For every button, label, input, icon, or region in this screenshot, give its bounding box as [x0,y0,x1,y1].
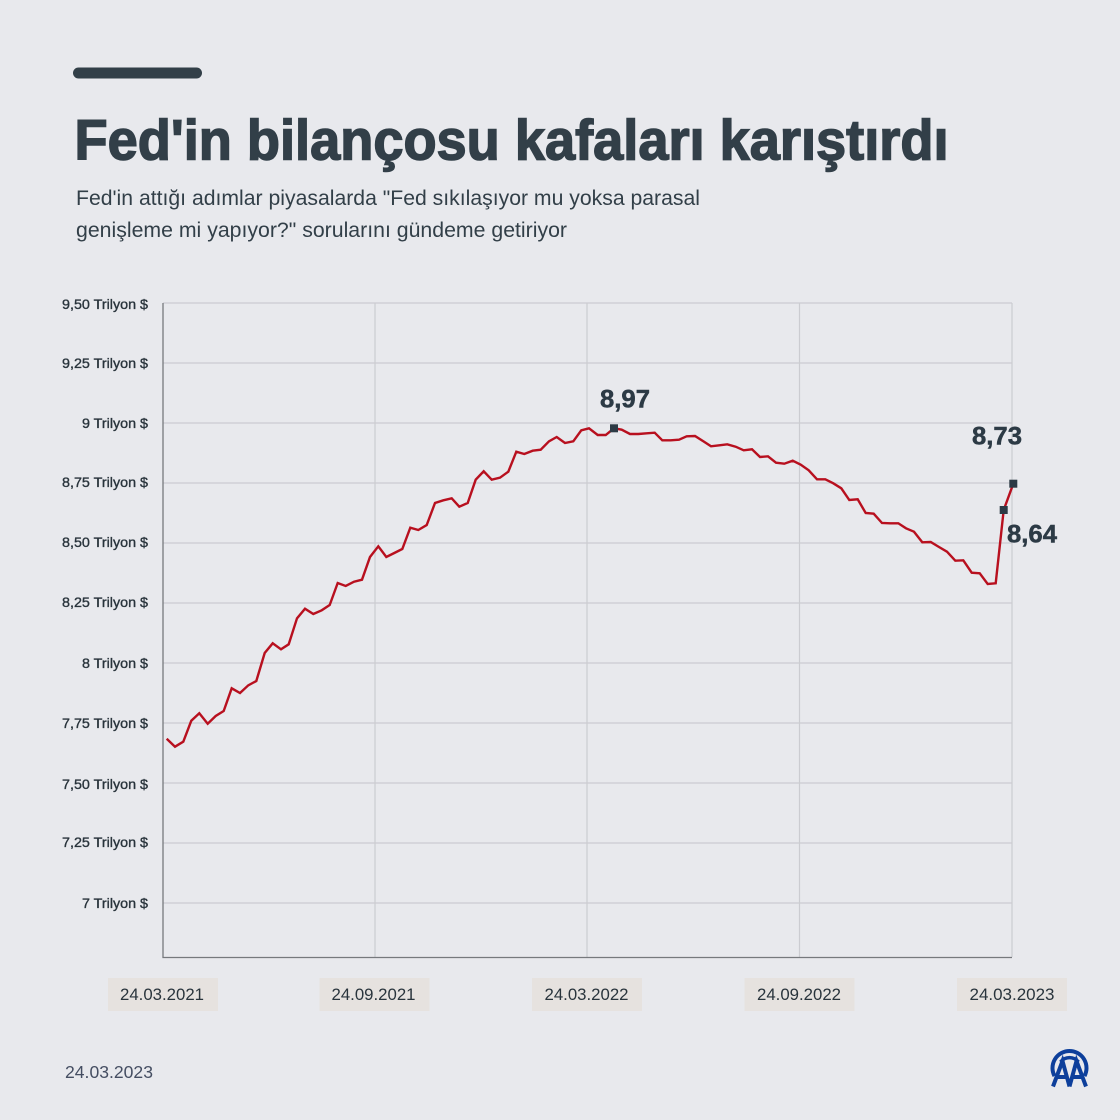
x axis date labels: 24.03.2022 [544,985,628,1004]
y axis labels: 8,50 Trilyon $ [62,534,148,550]
y axis labels: 7 Trilyon $ [82,895,148,911]
y axis labels: 9,50 Trilyon $ [62,296,148,312]
data line [167,428,1013,747]
data markers [610,424,1017,514]
chart grid [163,303,1012,957]
value labels [600,386,1057,548]
y axis labels: 8,75 Trilyon $ [62,474,148,490]
chart axes [163,303,1012,958]
title: Fed'in bilançosu kafaları karıştırdı [74,108,948,172]
y axis labels: 9,25 Trilyon $ [62,355,148,371]
subtitle [76,186,700,242]
y axis labels: 7,50 Trilyon $ [62,776,148,792]
date footer: 24.03.2023 [65,1062,153,1082]
value labels: 8,97 [600,386,650,414]
y axis labels: 7,75 Trilyon $ [62,715,148,731]
x axis date labels: 24.09.2021 [332,985,416,1004]
value labels: 8,64 [1007,520,1057,548]
y axis labels: 8 Trilyon $ [82,655,148,671]
accent bar [73,68,202,78]
y axis labels: 9 Trilyon $ [82,415,148,431]
x axis date labels [108,978,1067,1011]
x axis date labels: 24.09.2022 [757,985,841,1004]
icon: AA logo [1052,1051,1086,1086]
y axis labels [62,296,148,911]
subtitle: Fed'in attığı adımlar piyasalarda "Fed sıkılaşıyor mu yoksa parasal [76,186,700,210]
line chart [62,296,1057,958]
x axis date labels: 24.03.2021 [120,985,204,1004]
value labels: 8,73 [972,422,1022,450]
subtitle: genişleme mi yapıyor?" sorularını gündeme getiriyor [76,218,567,242]
y axis labels: 8,25 Trilyon $ [62,594,148,610]
y axis labels: 7,25 Trilyon $ [62,834,148,850]
x axis date labels: 24.03.2023 [970,985,1054,1004]
